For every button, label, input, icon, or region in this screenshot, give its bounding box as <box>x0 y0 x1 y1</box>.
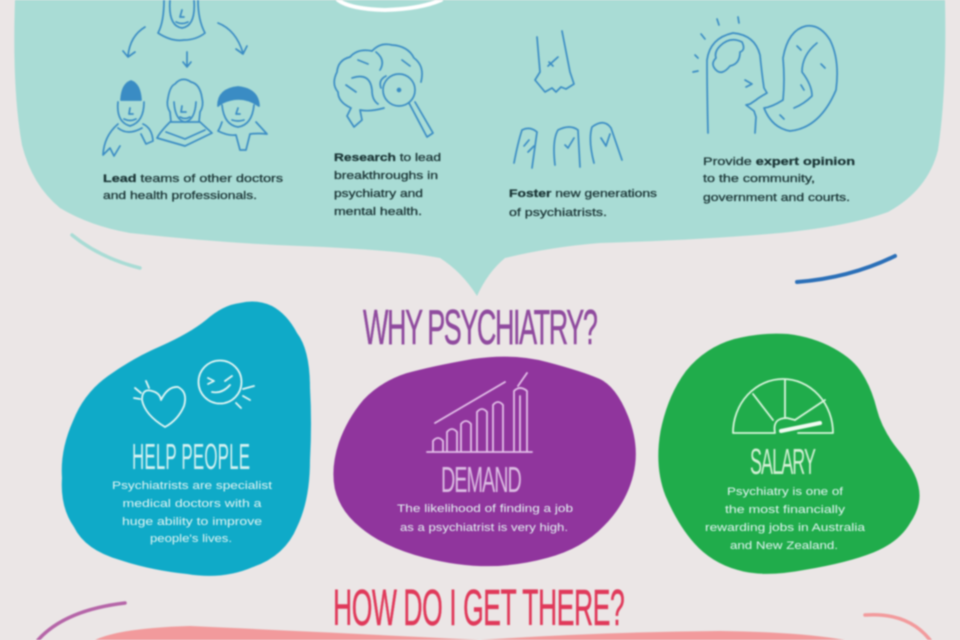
heading: help people: HELP PEOPLE <box>132 437 250 477</box>
panel: help people: huge ability to improve <box>122 516 262 528</box>
heading: how do I get there: HOW DO I GET THERE? <box>333 579 625 636</box>
panel: what psychiatrists do speech bubble <box>14 0 945 296</box>
text: foster: Foster new generations <box>509 188 658 200</box>
icon: team of people with arrows <box>103 0 267 156</box>
heading: salary: SALARY <box>750 442 816 483</box>
group: research: mental health. <box>334 206 422 218</box>
blob: purple background <box>333 357 636 566</box>
text: lead teams: Lead teams of other doctors <box>103 173 284 185</box>
group: research: psychiatry and <box>334 188 423 200</box>
icon: hands passing knowledge <box>514 31 622 168</box>
icon: salary gauge <box>733 379 833 433</box>
panel: salary: and New Zealand. <box>730 540 838 552</box>
group: foster <box>509 31 658 219</box>
group: foster: of psychiatrists. <box>509 207 607 219</box>
panel: salary <box>658 334 920 574</box>
heading: demand: DEMAND <box>441 461 522 501</box>
text: salary body: Psychiatry is one of <box>727 486 844 498</box>
panel: help people: people's lives. <box>150 533 232 545</box>
icon: heart and smiley <box>134 360 254 427</box>
text: help people body: Psychiatrists are specialist <box>112 480 272 492</box>
icon: head with thought and speech bubble <box>693 17 837 133</box>
group: lead teams: and health professionals. <box>103 190 257 202</box>
panel: demand <box>333 357 636 566</box>
decorative teal brush stroke <box>72 235 140 268</box>
white brush stroke at top <box>338 0 441 10</box>
panel: help people <box>62 302 311 576</box>
decorative pink brush stroke <box>865 615 930 640</box>
panel: pathway pink banner <box>95 626 845 640</box>
panel: help people: medical doctors with a <box>122 498 263 510</box>
panel: demand: as a psychiatrist is very high. <box>400 522 568 534</box>
icon: rising bar chart <box>427 373 532 452</box>
blob: green background <box>658 334 920 574</box>
blob: blue background <box>62 302 311 576</box>
group: research <box>334 44 441 218</box>
text: research: Research to lead <box>334 152 441 164</box>
icon: brain with magnifying glass <box>334 44 433 137</box>
decorative purple brush stroke <box>38 603 125 640</box>
group: expert opinion: to the community, <box>703 173 815 185</box>
group: lead teams <box>103 0 284 202</box>
group: expert opinion: government and courts. <box>703 192 850 204</box>
panel: salary: rewarding jobs in Australia <box>705 522 866 534</box>
decorative blue brush stroke <box>797 256 895 282</box>
group: expert opinion <box>693 17 855 204</box>
panel: salary: the most financially <box>725 504 846 516</box>
text: expert opinion: Provide expert opinion <box>703 156 855 168</box>
text: demand body: The likelihood of finding a job <box>397 503 573 515</box>
group: research: breakthroughs in <box>334 170 438 182</box>
heading: why psychiatry: WHY PSYCHIATRY? <box>363 301 598 355</box>
